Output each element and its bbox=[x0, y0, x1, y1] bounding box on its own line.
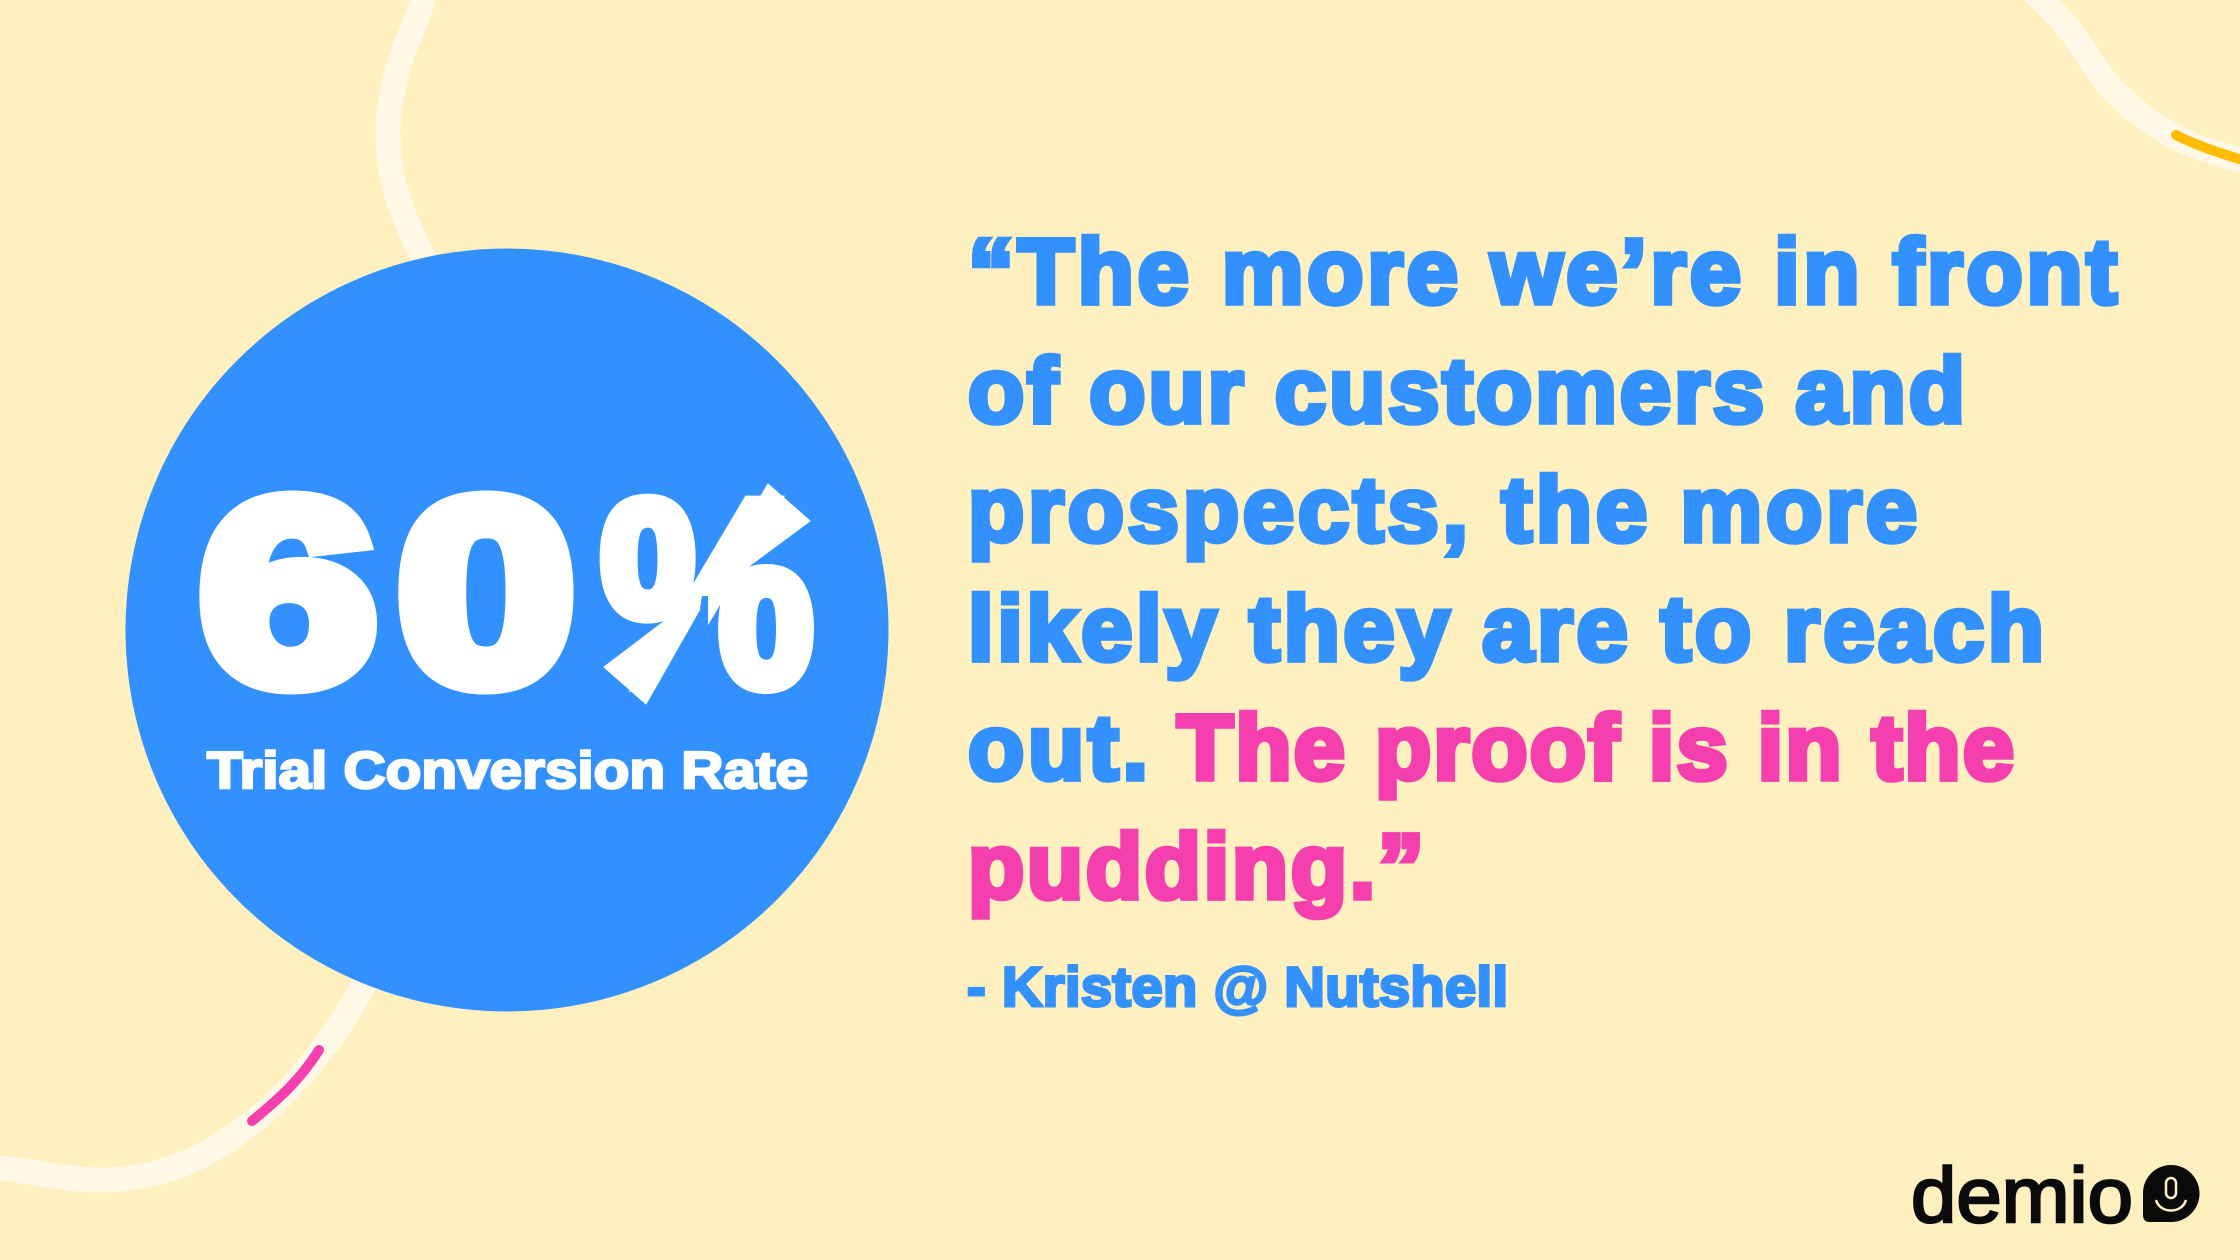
icon: microphone badge bbox=[2143, 1165, 2200, 1222]
decorative curve: bottom left bbox=[0, 940, 390, 1180]
quote text: out. bbox=[968, 697, 1148, 799]
quote highlight: pink bbox=[968, 697, 2014, 918]
accent: pink bbox=[252, 1050, 319, 1121]
accent: yellow bbox=[2176, 135, 2240, 162]
quote text: “The more we’re in front bbox=[968, 221, 2117, 323]
quote text: prospects, the more bbox=[968, 459, 1917, 561]
quote text bbox=[968, 221, 2117, 918]
decorative curve: top right bbox=[2030, 0, 2240, 163]
decorative curve: top left bbox=[388, 0, 440, 290]
stat: 60% bbox=[200, 446, 814, 742]
stat label: Trial Conversion Rate bbox=[207, 742, 808, 800]
logo: demio: demio bbox=[1911, 1151, 2133, 1239]
quote highlight: pink: The proof is in the bbox=[1177, 697, 2014, 799]
quote highlight: pink: pudding.” bbox=[968, 816, 1424, 918]
attribution: - Kristen @ Nutshell bbox=[967, 955, 1508, 1018]
quote text: of our customers and bbox=[968, 340, 1965, 442]
stat: 60%: 60 bbox=[200, 447, 574, 738]
quote text: likely they are to reach bbox=[968, 578, 2044, 680]
panel: blue stat circle bbox=[126, 248, 888, 1012]
stat: 60%: % bbox=[600, 446, 814, 742]
